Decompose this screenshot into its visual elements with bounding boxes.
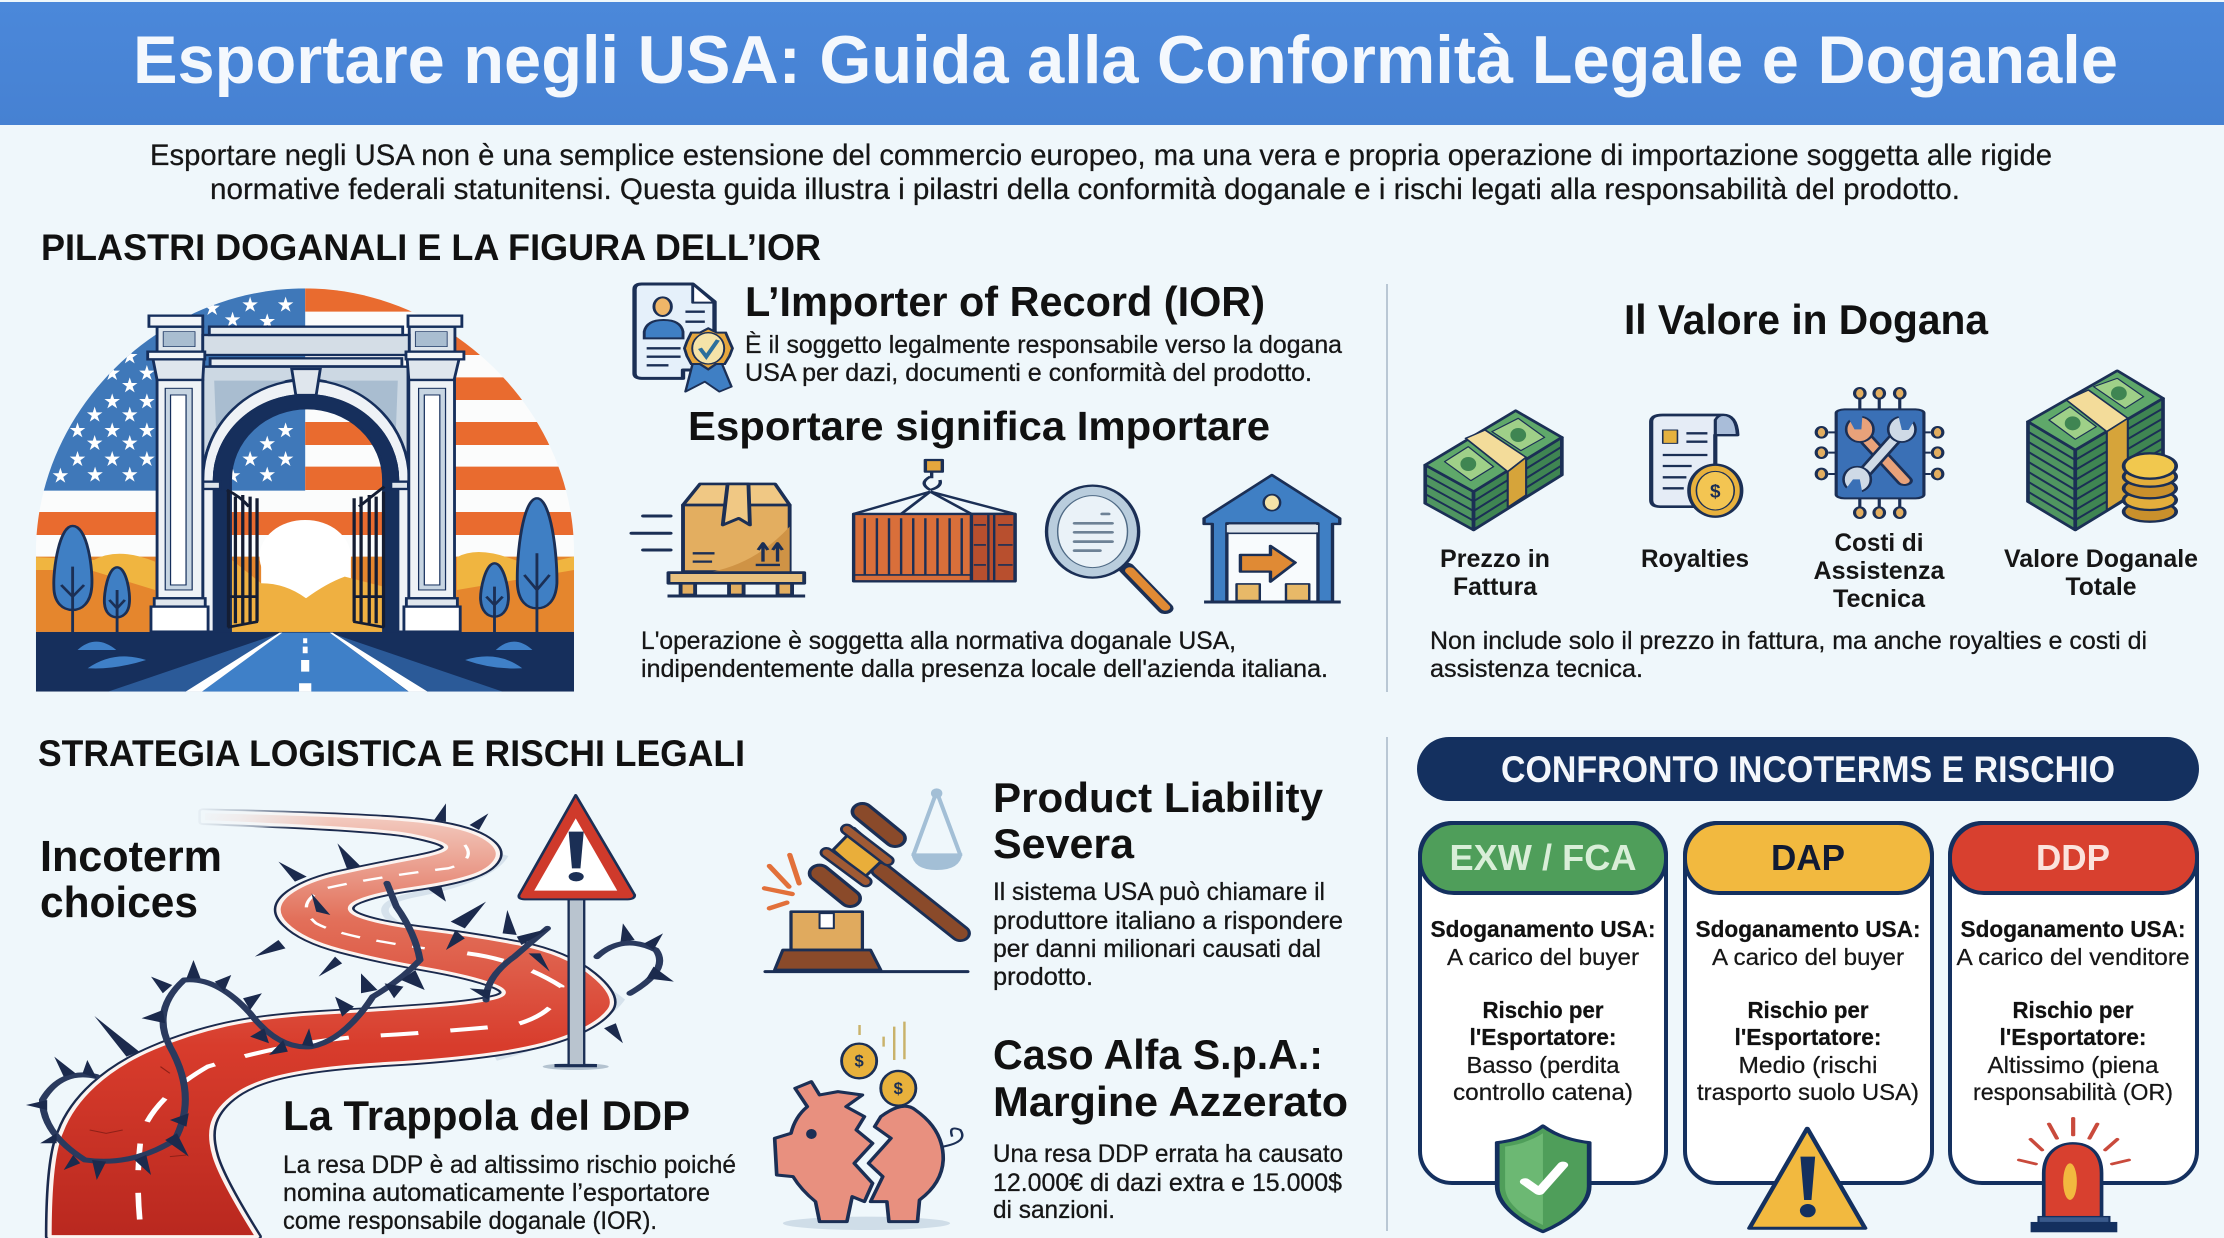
triumphal arch (148, 316, 464, 632)
heading: caso alfa: Margine Azzerato (993, 1078, 1348, 1125)
barbed wire (42, 883, 660, 1161)
icon: broken piggy bank (775, 1022, 962, 1230)
text: IOR description: USA per dazi, documenti e conformità del prodotto. (745, 359, 1312, 387)
heading: product liability: Product Liability (993, 774, 1324, 821)
section heading: pilastri doganali: PILASTRI DOGANALI E LA FIGURA DELL’IOR (41, 227, 821, 268)
card: DDP: responsabilità (OR) (1973, 1079, 2173, 1105)
label: prezzo in fattura (1440, 545, 1550, 601)
text: product liability description: produttore italiano a rispondere (993, 907, 1343, 935)
card: EXW / FCA (1420, 823, 1666, 1183)
heading: la trappola del ddp: La Trappola del DDP (283, 1092, 690, 1139)
icon: importer certificate (635, 284, 732, 392)
heading: esportare significa importare: Esportare significa Importare (688, 403, 1270, 449)
card: EXW / FCA: controllo catena) (1453, 1079, 1633, 1105)
banner: confronto incoterms (1417, 737, 2199, 801)
label: incoterm choices: Incoterm (40, 832, 222, 881)
icon row: box, container, magnifier, warehouse (632, 460, 1341, 608)
road outer edge (50, 812, 612, 1237)
card: EXW / FCA: Basso (perdita (1466, 1052, 1620, 1078)
header banner (0, 2, 2224, 125)
label: costi di assistenza tecnica: Costi di (1834, 529, 1924, 557)
card: DAP: Sdoganamento USA: (1696, 916, 1920, 942)
label: costi di assistenza tecnica: Tecnica (1833, 585, 1926, 613)
card: EXW / FCA: Sdoganamento USA: (1430, 916, 1656, 942)
text: caso alfa description (993, 1140, 1343, 1224)
title: Esportare negli USA: Guida alla Conformità Legale e Doganale (133, 22, 2118, 98)
icon: broken piggy bank: $ (855, 1051, 864, 1071)
text: product liability description: Il sistema USA può chiamare il (993, 878, 1325, 906)
text: valore description (1430, 627, 2147, 683)
text: valore description: Non include solo il prezzo in fattura, ma anche royalties e costi di (1430, 627, 2147, 655)
heading: product liability: Severa (993, 820, 1135, 867)
shadow under road (385, 855, 621, 1058)
section heading: strategia logistica: STRATEGIA LOGISTICA E RISCHI LEGALI (38, 733, 745, 774)
label: incoterm choices (40, 832, 222, 927)
card: DAP: A carico del buyer (1712, 944, 1904, 970)
label: prezzo in fattura: Prezzo in (1440, 545, 1550, 573)
icon: invoice price money stack (1425, 411, 1562, 530)
warning sign (519, 795, 635, 1070)
icon: yellow warning triangle (1749, 1128, 1865, 1228)
card: DAP: Rischio per (1748, 997, 1869, 1023)
value icons (1425, 371, 2176, 530)
label: valore doganale totale (2004, 545, 2198, 601)
card: DAP: Medio (rischi (1738, 1052, 1878, 1078)
card: DDP: DDP (2036, 837, 2110, 878)
icon: shipping container (854, 460, 1015, 581)
label: incoterm choices: choices (40, 878, 198, 927)
text: operazione soggetta: L'operazione è soggetta alla normativa doganale USA, (641, 627, 1236, 655)
text: operazione soggetta: indipendentemente dalla presenza locale dell'azienda italiana. (641, 655, 1328, 683)
heading: caso alfa (993, 1031, 1348, 1125)
card: EXW / FCA: l'Esportatore: (1470, 1024, 1616, 1050)
text: caso alfa description: Una resa DDP errata ha causato (993, 1140, 1343, 1168)
heading: importer of record: L’Importer of Record (IOR) (745, 278, 1265, 325)
winding road (50, 812, 612, 1237)
divider upper (1386, 284, 1388, 692)
label: royalties: Royalties (1641, 545, 1749, 573)
text: product liability description: per danni milionari causati dal (993, 935, 1321, 963)
intro paragraph: Esportare negli USA non è una semplice estensione del commercio europeo, ma una vera e propria operazione di importazione soggetta alle rigide (150, 139, 2052, 172)
card: DAP: l'Esportatore: (1734, 1024, 1882, 1050)
label: costi di assistenza tecnica: Assistenza (1814, 557, 1946, 585)
card: DDP: Sdoganamento USA: (1960, 916, 2186, 942)
illustration: thorny red road with warning sign (26, 795, 674, 1237)
text: caso alfa description: di sanzioni. (993, 1196, 1115, 1224)
heading: il valore in dogana: Il Valore in Dogana (1624, 296, 1989, 343)
divider lower (1386, 737, 1388, 1231)
text: trappola description: La resa DDP è ad altissimo rischio poiché (283, 1151, 736, 1179)
label: prezzo in fattura: Fattura (1453, 573, 1538, 601)
text: trappola description (283, 1151, 736, 1235)
heading: product liability (993, 774, 1324, 867)
thorns (26, 803, 674, 1180)
intro paragraph: normative federali statunitensi. Questa guida illustra i pilastri della conformità doganale e i rischi legati alla responsabilità del prodotto. (210, 173, 1960, 206)
card: DAP: DAP (1771, 837, 1845, 878)
text: product liability description (993, 878, 1343, 991)
text: product liability description: prodotto. (993, 963, 1093, 991)
icon: technical assistance chip (1816, 388, 1943, 518)
card: EXW / FCA: EXW / FCA (1450, 837, 1636, 878)
iron gates (227, 487, 384, 627)
label: costi di assistenza tecnica (1814, 529, 1946, 613)
card: DDP: Rischio per (2012, 997, 2134, 1023)
icon: broken piggy bank: $ (894, 1079, 904, 1098)
risk icons (1497, 1118, 2129, 1232)
text: operazione soggetta (641, 627, 1328, 683)
intro paragraph (150, 139, 2052, 206)
icon: total customs value stack (2028, 371, 2176, 530)
banner: confronto incoterms: CONFRONTO INCOTERMS E RISCHIO (1501, 749, 2115, 790)
heading: caso alfa: Caso Alfa S.p.A.: (993, 1031, 1323, 1078)
icon: magnifier (1047, 486, 1165, 608)
card: DDP: A carico del venditore (1956, 944, 2190, 970)
card: EXW / FCA: A carico del buyer (1447, 944, 1639, 970)
card: DAP: trasporto suolo USA) (1697, 1079, 1919, 1105)
text: valore description: assistenza tecnica. (1430, 655, 1643, 683)
text: IOR description: È il soggetto legalmente responsabile verso la dogana (745, 330, 1342, 359)
text: caso alfa description: 12.000€ di dazi extra e 15.000$ (993, 1169, 1342, 1197)
label: valore doganale totale: Totale (2066, 573, 2137, 601)
icon: gavel and scale (764, 788, 968, 972)
icon: parcel on pallet (632, 484, 805, 596)
icon: warehouse (1204, 475, 1341, 602)
text: IOR description (745, 330, 1342, 387)
card: EXW / FCA: Rischio per (1482, 997, 1604, 1023)
text: trappola description: come responsabile doganale (IOR). (283, 1207, 657, 1235)
icon: royalties document and coin (1651, 415, 1742, 517)
icon: green shield (1497, 1126, 1589, 1232)
illustration: arch with US flag (33, 287, 579, 693)
card: DDP (1950, 823, 2197, 1183)
card: DDP: Altissimo (piena (1988, 1052, 2159, 1078)
label: valore doganale totale: Valore Doganale (2004, 545, 2198, 573)
icon: royalties document and coin: $ (1710, 480, 1721, 501)
icon: red siren (2019, 1118, 2129, 1232)
trees (54, 498, 557, 632)
text: trappola description: nomina automaticamente l’esportatore (283, 1179, 710, 1207)
card: DAP (1685, 823, 1932, 1183)
card: DDP: l'Esportatore: (2000, 1024, 2146, 1050)
